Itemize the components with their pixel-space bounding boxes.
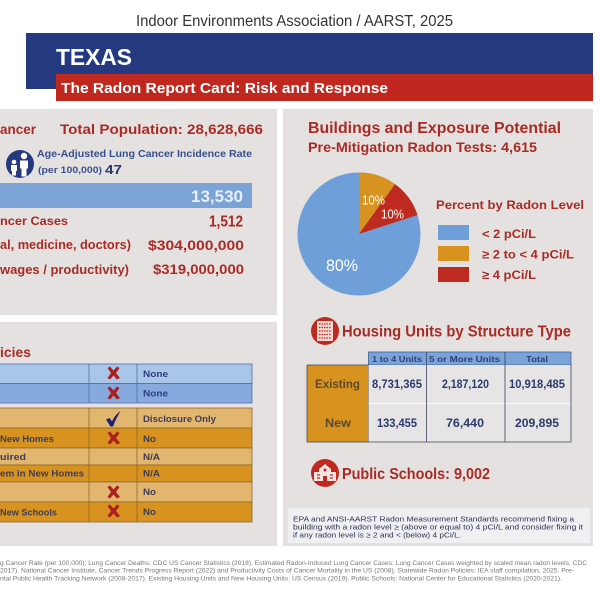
pie chart: 10% bbox=[362, 192, 385, 208]
footer: sources: g Cancer Rate (per 100,000); Lung Cancer Deaths: CDC US Cancer Statistics (2018). Estimated Radon-Induced Lung Cancer Cases: Lung Cancer Cases weighted by scaled mean radon levels, CDC bbox=[0, 561, 588, 567]
policy status text: No bbox=[143, 487, 157, 497]
row: lung cancer deaths: 13,530 bbox=[191, 187, 243, 206]
table: housing units: New bbox=[325, 418, 351, 430]
panel: policies bbox=[0, 322, 277, 546]
pie chart: 80% bbox=[326, 256, 358, 275]
table: housing units bbox=[307, 352, 571, 442]
heading: policies: icies bbox=[0, 344, 31, 360]
heading: lung cancer: ancer bbox=[0, 121, 37, 137]
public schools: Public Schools: 9,002 bbox=[342, 466, 490, 483]
incidence rate: Age-Adjusted Lung Cancer Incidence Rate bbox=[37, 149, 252, 160]
incidence rate: 47 bbox=[105, 162, 122, 177]
icon: apartment building bbox=[311, 317, 339, 345]
legend: Percent by Radon Level bbox=[436, 198, 584, 212]
subtitle bar: The Radon Report Card: Risk and Response bbox=[61, 80, 388, 97]
row: medical costs: al, medicine, doctors) bbox=[0, 238, 131, 252]
table: housing units: Total bbox=[526, 354, 548, 364]
heading: housing units: Housing Units by Structure Type bbox=[342, 324, 571, 340]
incidence rate bbox=[37, 149, 252, 177]
table: housing units: 133,455 bbox=[377, 418, 418, 430]
table: housing units: 5 or More Units bbox=[429, 354, 500, 364]
source title: Indoor Environments Association / AARST, 2025 bbox=[136, 13, 453, 30]
pie chart: 10% bbox=[381, 206, 404, 222]
table: housing units: 209,895 bbox=[515, 418, 560, 430]
policy status text: No bbox=[143, 434, 157, 444]
incidence rate: (per 100,000) bbox=[38, 165, 102, 176]
footer: sources: ntal Public Health Tracking Network (2008-2017). Existing Housing Units and New Housing Units: US Census (2019). Public Schools: National Center for Educational Statistics (2020-2021). bbox=[0, 576, 562, 582]
table: housing units: 76,440 bbox=[446, 418, 484, 430]
policy status text bbox=[143, 369, 216, 517]
icon: people bbox=[6, 150, 34, 178]
policy names: uired bbox=[0, 452, 26, 462]
table: blue policy rows bbox=[0, 364, 252, 403]
table: housing units: Existing bbox=[315, 379, 360, 391]
table: orange policy rows bbox=[0, 408, 252, 522]
policy status text: N/A bbox=[143, 468, 161, 478]
policy names bbox=[0, 434, 84, 518]
callout: EPA recommendation bbox=[288, 508, 590, 543]
callout: EPA recommendation: building with a radon level ≥ (above or equal to) 4 pCi/L and consider fixing it bbox=[293, 522, 584, 532]
callout: EPA recommendation: EPA and ANSI-AARST Radon Measurement Standards recommend fixing a bbox=[293, 514, 575, 524]
heading: buildings: Buildings and Exposure Potential bbox=[308, 120, 561, 137]
panel: buildings and exposure bbox=[283, 109, 593, 546]
row: lung cancer deaths bbox=[0, 183, 252, 208]
row: productivity costs: wages / productivity) bbox=[0, 263, 129, 277]
table: housing units: 2,187,120 bbox=[442, 379, 489, 391]
legend bbox=[436, 198, 584, 282]
policy names: New Schools bbox=[0, 508, 57, 518]
policy status text: No bbox=[143, 507, 157, 517]
policy status text: None bbox=[143, 388, 168, 398]
row: radon-induced cases: ncer Cases bbox=[0, 214, 68, 228]
row: medical costs bbox=[0, 238, 244, 253]
icon: school bbox=[311, 459, 339, 487]
total population: Total Population: 28,628,666 bbox=[60, 121, 263, 137]
policy status text: N/A bbox=[143, 452, 161, 462]
legend: ≥ 2 to < 4 pCi/L bbox=[482, 248, 574, 262]
header banner bbox=[26, 33, 593, 101]
policy status text: Disclosure Only bbox=[143, 414, 216, 424]
table: housing units: 1 to 4 Units bbox=[372, 354, 422, 364]
legend: < 2 pCi/L bbox=[482, 227, 536, 241]
policy names: New Homes bbox=[0, 434, 54, 444]
state name: TEXAS bbox=[56, 44, 132, 70]
row: radon-induced cases: 1,512 bbox=[209, 214, 243, 230]
status marks bbox=[106, 366, 120, 518]
row: radon-induced cases bbox=[0, 214, 243, 230]
table: housing units: 10,918,485 bbox=[509, 379, 566, 391]
legend: ≥ 4 pCi/L bbox=[482, 268, 536, 282]
row: medical costs: $304,000,000 bbox=[148, 238, 244, 253]
panel: lung cancer bbox=[0, 109, 277, 315]
radon tests: Pre-Mitigation Radon Tests: 4,615 bbox=[308, 139, 537, 155]
row: productivity costs bbox=[0, 262, 244, 277]
subtitle bar bbox=[56, 74, 593, 101]
policy status text: None bbox=[143, 369, 168, 379]
pie chart bbox=[298, 172, 420, 296]
policy names: em in New Homes bbox=[0, 468, 84, 478]
footer: sources bbox=[0, 561, 588, 582]
footer: sources: 2017). National Cancer Institute, Cancer Trends Progress Report (2022) and Productivity Costs of Cancer Mortality in the US (2008). Statewide Radon Policies: IEA staff compilation, 2025. Pre- bbox=[0, 568, 574, 574]
row: productivity costs: $319,000,000 bbox=[153, 262, 244, 277]
table: housing units: 8,731,365 bbox=[372, 379, 423, 391]
callout: EPA recommendation: if any radon level is ≥ 2 and < (below) 4 pCi/L. bbox=[293, 530, 461, 540]
